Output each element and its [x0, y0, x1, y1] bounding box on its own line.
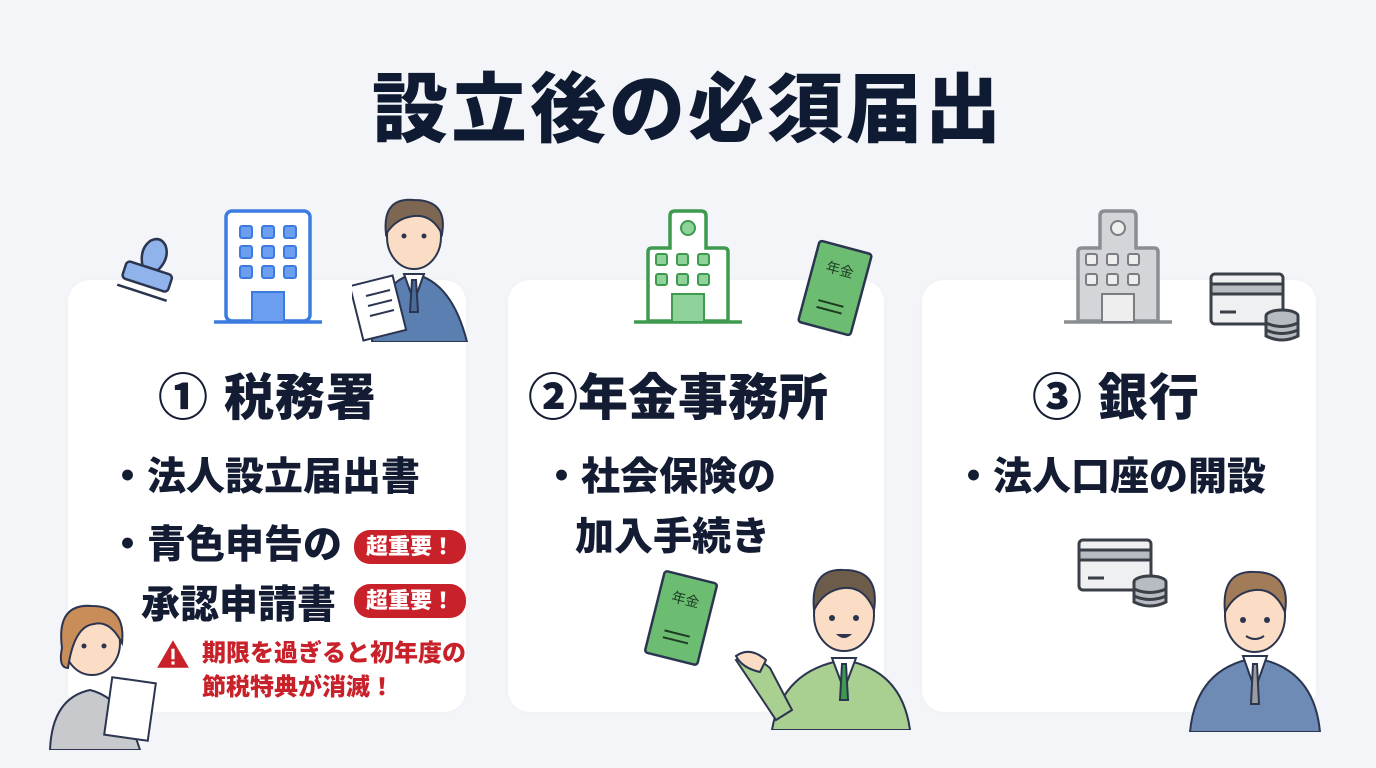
icon: pension book top: 年金	[824, 256, 856, 283]
bullet: blue return application: ・青色申告の	[108, 524, 342, 567]
warning text: 期限を過ぎると初年度の	[202, 640, 466, 667]
panel: bank	[922, 280, 1316, 712]
bullet: blue return application: 承認申請書	[141, 584, 336, 627]
callout: very important 1	[354, 530, 466, 564]
icon: man with document	[352, 198, 468, 342]
icon: pension book bottom: 年金	[670, 586, 702, 613]
icon: pension book top	[798, 240, 873, 336]
callout: very important 2: 超重要！	[366, 588, 454, 613]
icon: man in green suit	[734, 568, 911, 730]
bullet: social insurance: 加入手続き	[575, 516, 770, 559]
heading: tax office: ① 税務署	[158, 370, 377, 426]
panel: tax office	[68, 280, 466, 712]
callout: very important 1: 超重要！	[366, 534, 454, 559]
callout: very important 2	[354, 584, 466, 618]
heading: bank: ③ 銀行	[1032, 370, 1200, 426]
icon: card and coins top	[1210, 272, 1300, 342]
bullet: corporate account: ・法人口座の開設	[954, 456, 1266, 499]
icon: stamp	[116, 238, 174, 302]
bullet: social insurance: ・社会保険の	[542, 456, 776, 499]
icon: man in blue suit	[1189, 570, 1321, 732]
heading: pension office: ②年金事務所	[528, 370, 828, 426]
title: 設立後の必須届出	[372, 68, 1004, 153]
icon: card and coins bottom	[1078, 538, 1168, 608]
bullet: blue return application	[108, 524, 342, 627]
bullet: social insurance	[542, 456, 776, 559]
panel: pension office	[508, 280, 884, 712]
warning text	[202, 640, 466, 701]
icon: bank building	[1064, 209, 1172, 324]
icon: pension office building	[634, 209, 742, 324]
bullet: corporation establishment notice: ・法人設立届出書	[108, 456, 420, 499]
icon: tax office building	[214, 209, 322, 324]
icon: woman with paper	[49, 604, 157, 750]
icon: pension book bottom	[644, 570, 718, 666]
icon: warning	[157, 640, 189, 668]
warning text: 節税特典が消滅！	[202, 674, 394, 701]
